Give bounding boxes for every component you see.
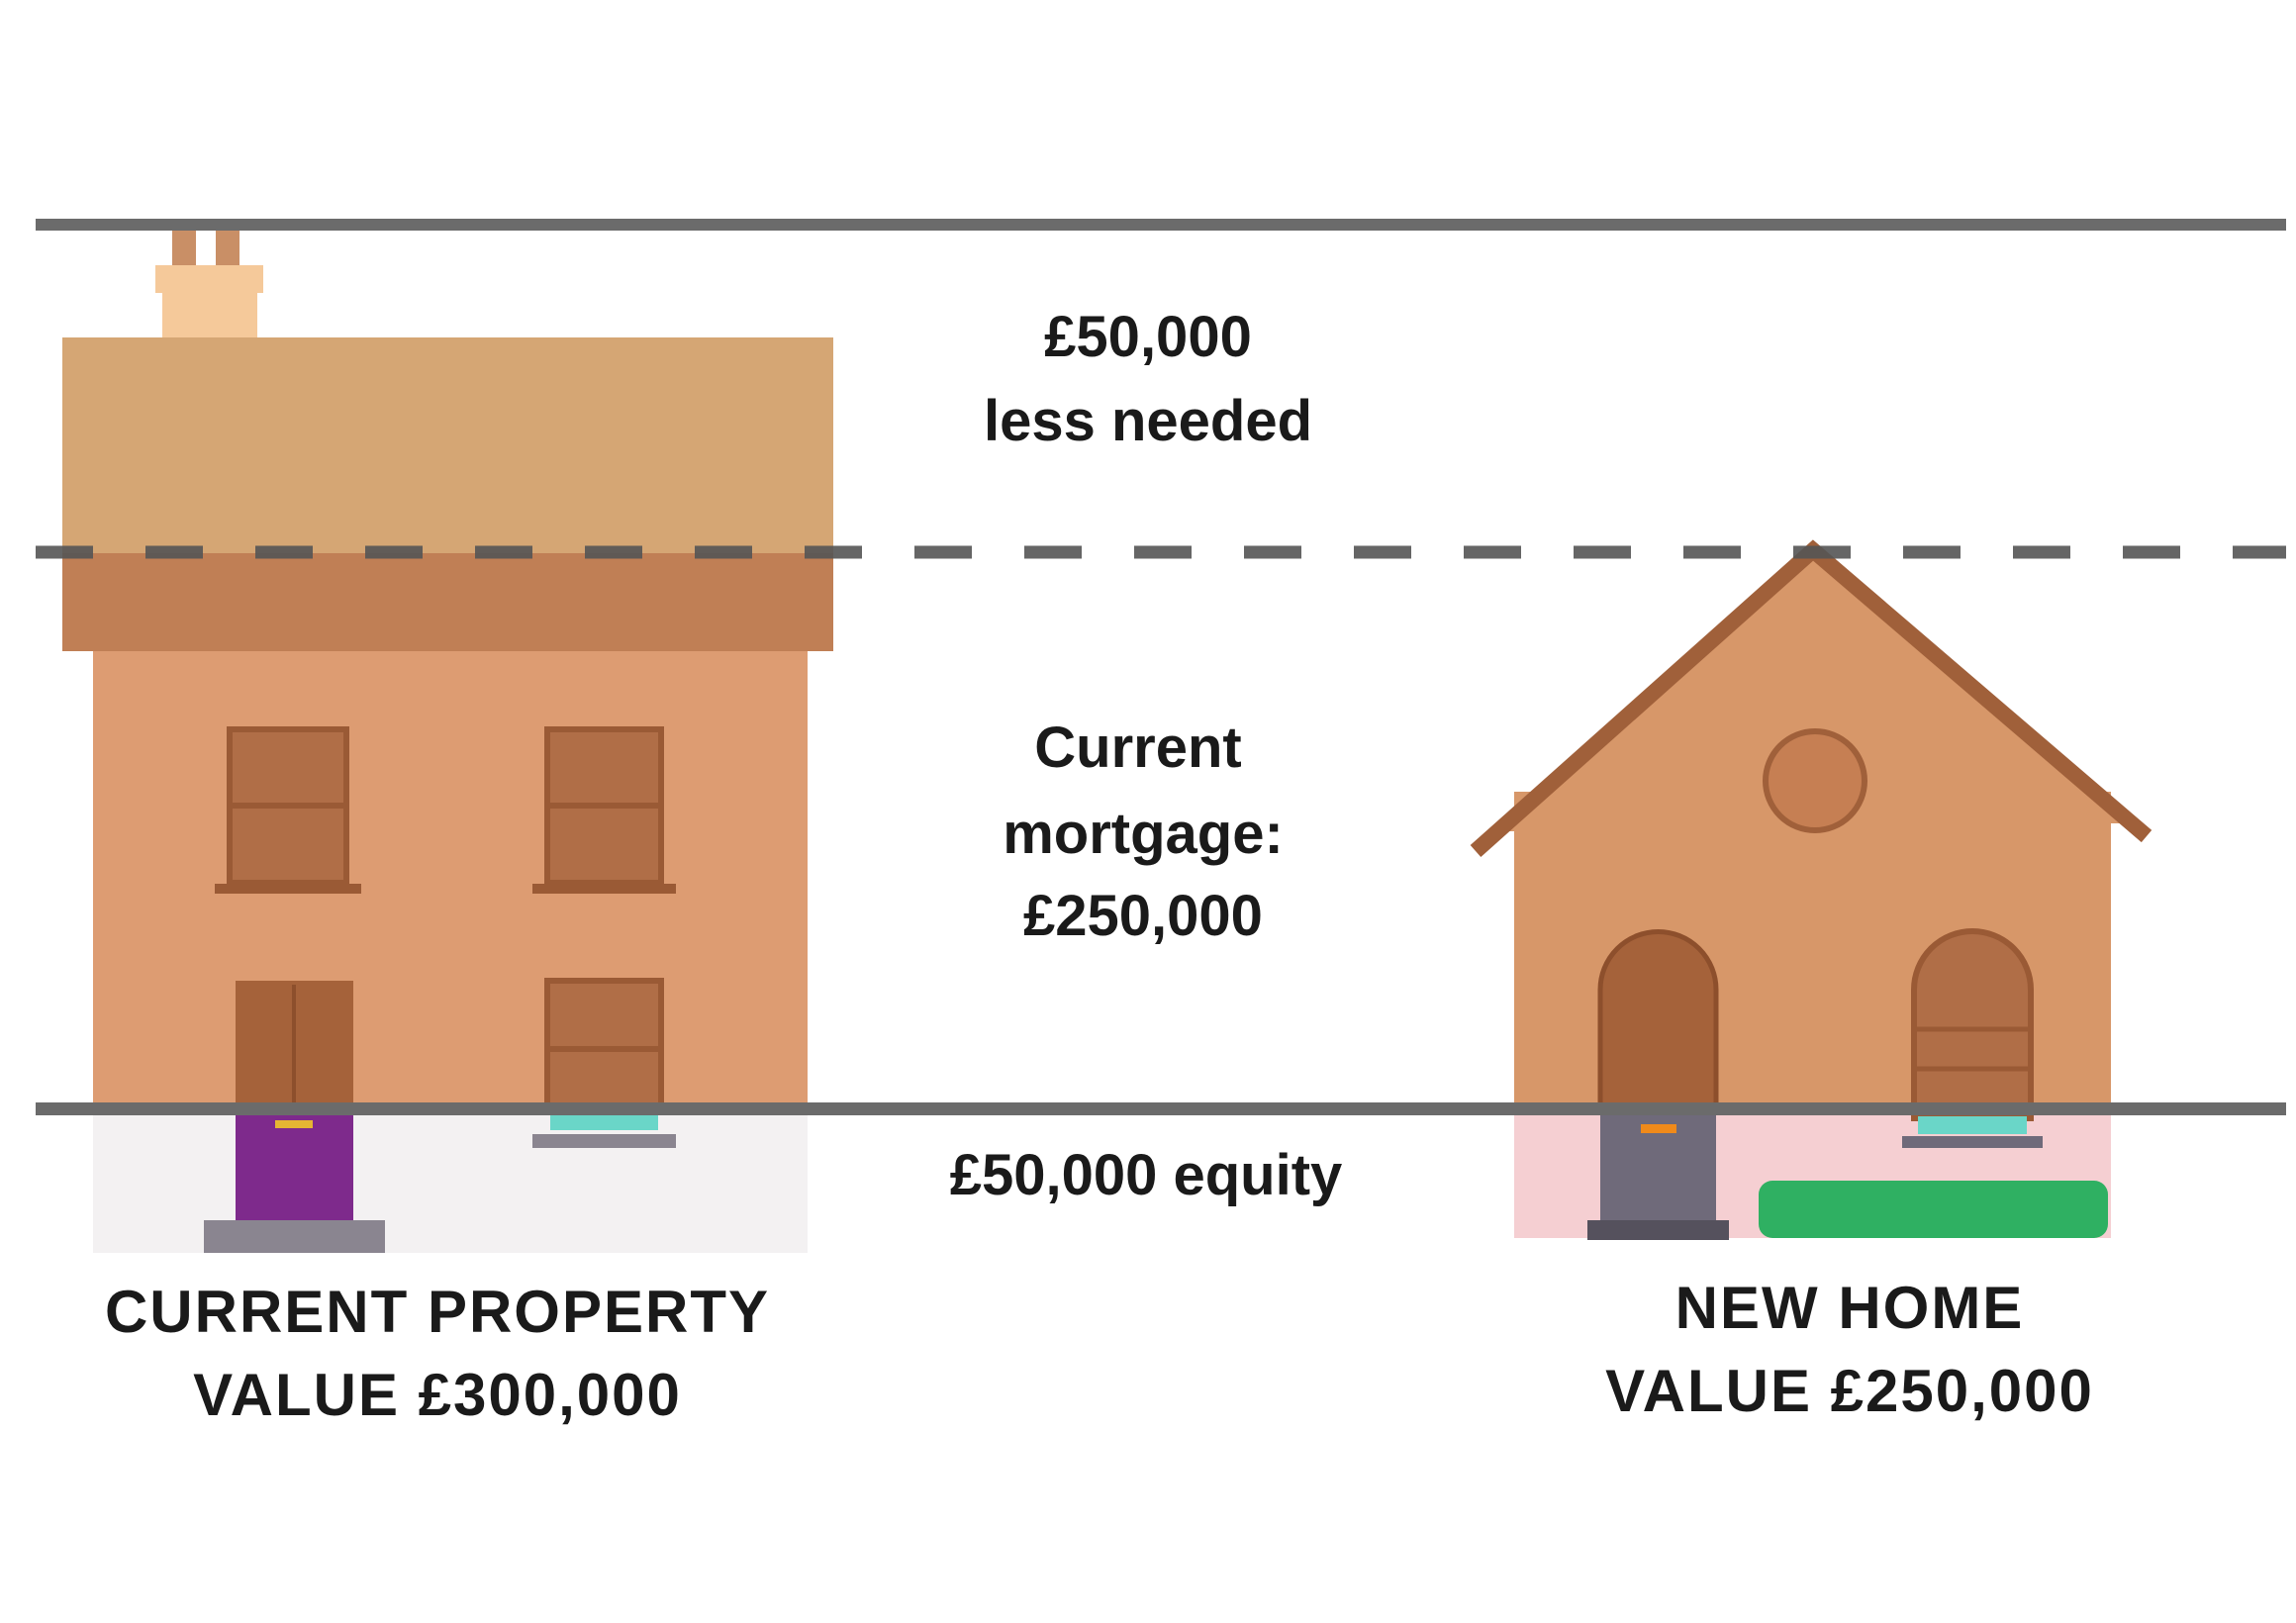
arched window bbox=[1902, 931, 2043, 1148]
door bbox=[204, 981, 385, 1253]
dashed mortgage line bbox=[36, 546, 2286, 558]
roof bbox=[62, 337, 833, 651]
house body bbox=[93, 651, 808, 1108]
text: current mortgage bbox=[1003, 716, 1284, 948]
label: new home: VALUE £250,000 bbox=[1605, 1358, 2094, 1424]
chimney bbox=[155, 222, 263, 370]
text: current mortgage: Current bbox=[1034, 716, 1242, 780]
hedge bbox=[1759, 1181, 2108, 1238]
text: current mortgage: £250,000 bbox=[1023, 884, 1263, 948]
round window bbox=[1766, 731, 1865, 830]
text: less needed: less needed bbox=[984, 389, 1312, 453]
label: new home bbox=[1605, 1275, 2094, 1424]
text: equity: £50,000 equity bbox=[950, 1143, 1342, 1207]
lower window bbox=[532, 981, 676, 1148]
label: new home: NEW HOME bbox=[1675, 1275, 2024, 1341]
top value line bbox=[36, 219, 2286, 231]
text: less needed bbox=[984, 305, 1312, 453]
new home house bbox=[1476, 550, 2147, 1240]
label: current property bbox=[105, 1279, 770, 1428]
text: less needed: £50,000 bbox=[1044, 305, 1252, 369]
arched door bbox=[1587, 932, 1729, 1240]
bottom equity line bbox=[36, 1102, 2286, 1115]
text: current mortgage: mortgage: bbox=[1003, 802, 1284, 866]
upper windows bbox=[215, 729, 676, 894]
current property house bbox=[62, 222, 833, 1253]
label: current property: CURRENT PROPERTY bbox=[105, 1279, 770, 1345]
label: current property: VALUE £300,000 bbox=[193, 1362, 682, 1428]
